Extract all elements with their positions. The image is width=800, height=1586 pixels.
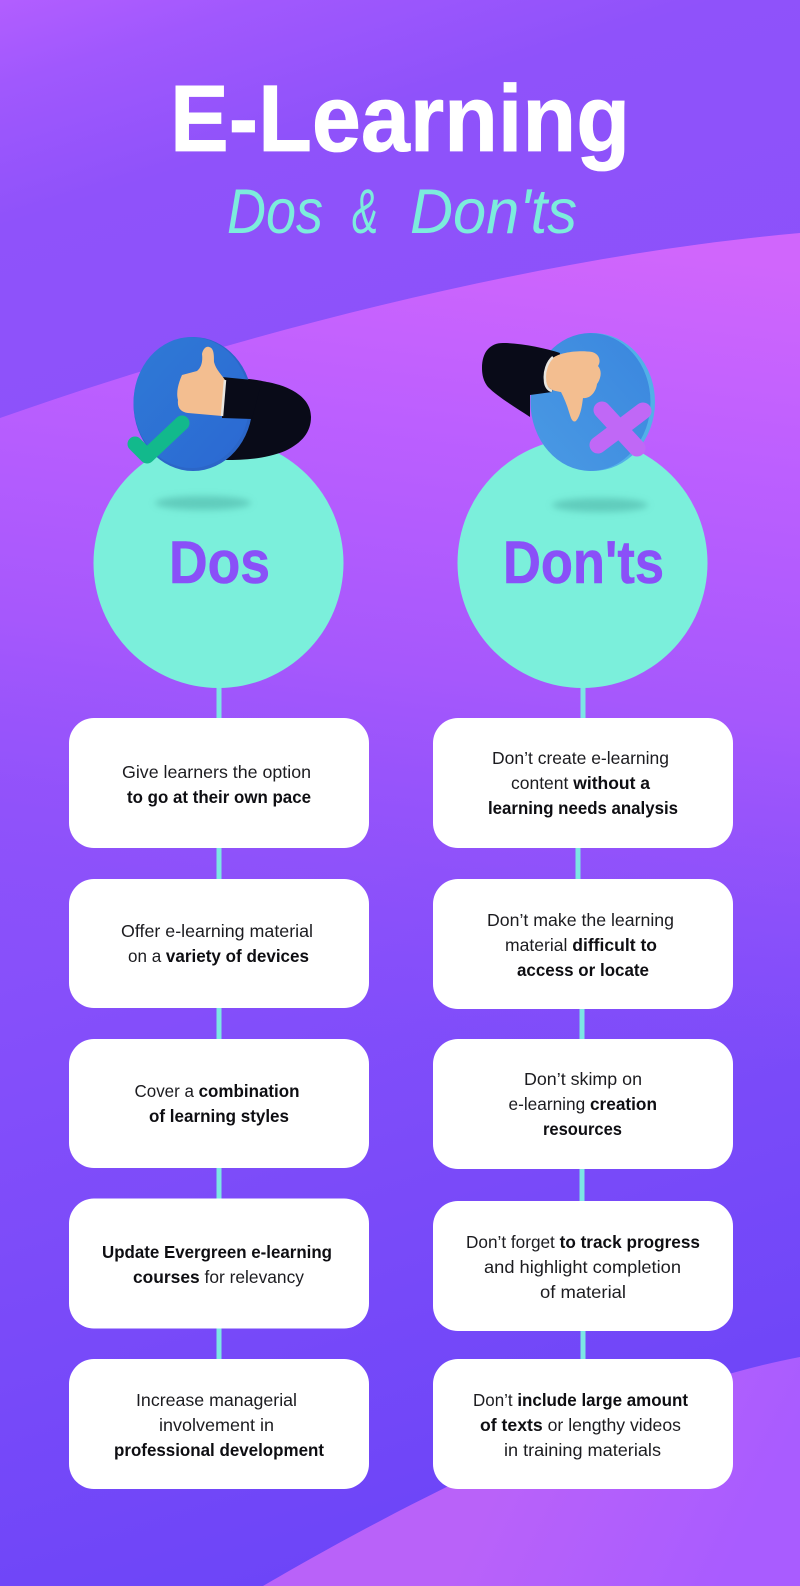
card: donts 4: Don’t forget to track progress: [466, 1232, 700, 1252]
card: donts 4: [433, 1201, 733, 1331]
card: donts 3: e-learning creation: [508, 1094, 657, 1114]
card: dos 5: [69, 1359, 369, 1489]
card: donts 5: Don’t include large amount: [473, 1390, 688, 1410]
connector lines: donts: [576, 686, 586, 1361]
card: donts 1: content without a: [511, 773, 650, 793]
card: donts 1: [433, 718, 733, 848]
card: dos 5: Increase managerial: [136, 1390, 297, 1410]
card: dos 4: [69, 1198, 369, 1328]
icon: thumbs up: [134, 337, 311, 510]
card: dos 1: to go at their own pace: [127, 787, 311, 807]
card: donts 2: [433, 879, 733, 1009]
card: dos 5: involvement in: [159, 1415, 274, 1435]
card: dos 4: Update Evergreen e-learning: [102, 1242, 332, 1262]
card: dos 2: [69, 879, 369, 1008]
card: dos 2: on a variety of devices: [128, 946, 309, 966]
card: donts 2: access or locate: [517, 960, 649, 980]
icon: thumbs down: [482, 333, 655, 512]
card: donts 3: [433, 1039, 733, 1169]
card: dos 1: [69, 718, 369, 848]
panel: dos: [69, 337, 369, 1489]
card: donts 5: in training materials: [504, 1440, 661, 1460]
subtitle: [227, 177, 577, 247]
card: dos 3: of learning styles: [149, 1106, 289, 1126]
card: donts 2: material difficult to: [505, 935, 657, 955]
heading: donts: Don'ts: [503, 529, 664, 596]
card: dos 3: [69, 1039, 369, 1168]
card: dos 4: courses for relevancy: [133, 1267, 304, 1287]
card: dos 2: Offer e-learning material: [121, 921, 313, 941]
heading: dos: Dos: [169, 529, 270, 596]
card: donts 3: Don’t skimp on: [524, 1069, 642, 1089]
card: donts 5: [433, 1359, 733, 1489]
card: donts 4: of material: [540, 1282, 626, 1302]
card: donts 2: Don’t make the learning: [487, 910, 674, 930]
card: dos 3: Cover a combination: [134, 1081, 300, 1101]
subtitle: &: [352, 177, 378, 247]
panel: donts: [433, 333, 733, 1489]
card: dos 1: Give learners the option: [122, 762, 311, 782]
subtitle: Don'ts: [410, 177, 577, 247]
card: donts 1: learning needs analysis: [488, 798, 678, 818]
connector lines: dos: [216, 686, 222, 1361]
card: donts 1: Don’t create e-learning: [492, 748, 669, 768]
heading circle: donts: [458, 438, 708, 688]
subtitle: Dos: [227, 177, 323, 247]
card: dos 5: professional development: [114, 1440, 324, 1460]
heading circle: dos: [94, 438, 344, 688]
title: E-Learning: [170, 66, 630, 172]
card: donts 3: resources: [543, 1119, 622, 1139]
card: donts 5: of texts or lengthy videos: [480, 1415, 681, 1435]
card: donts 4: and highlight completion: [484, 1257, 681, 1277]
